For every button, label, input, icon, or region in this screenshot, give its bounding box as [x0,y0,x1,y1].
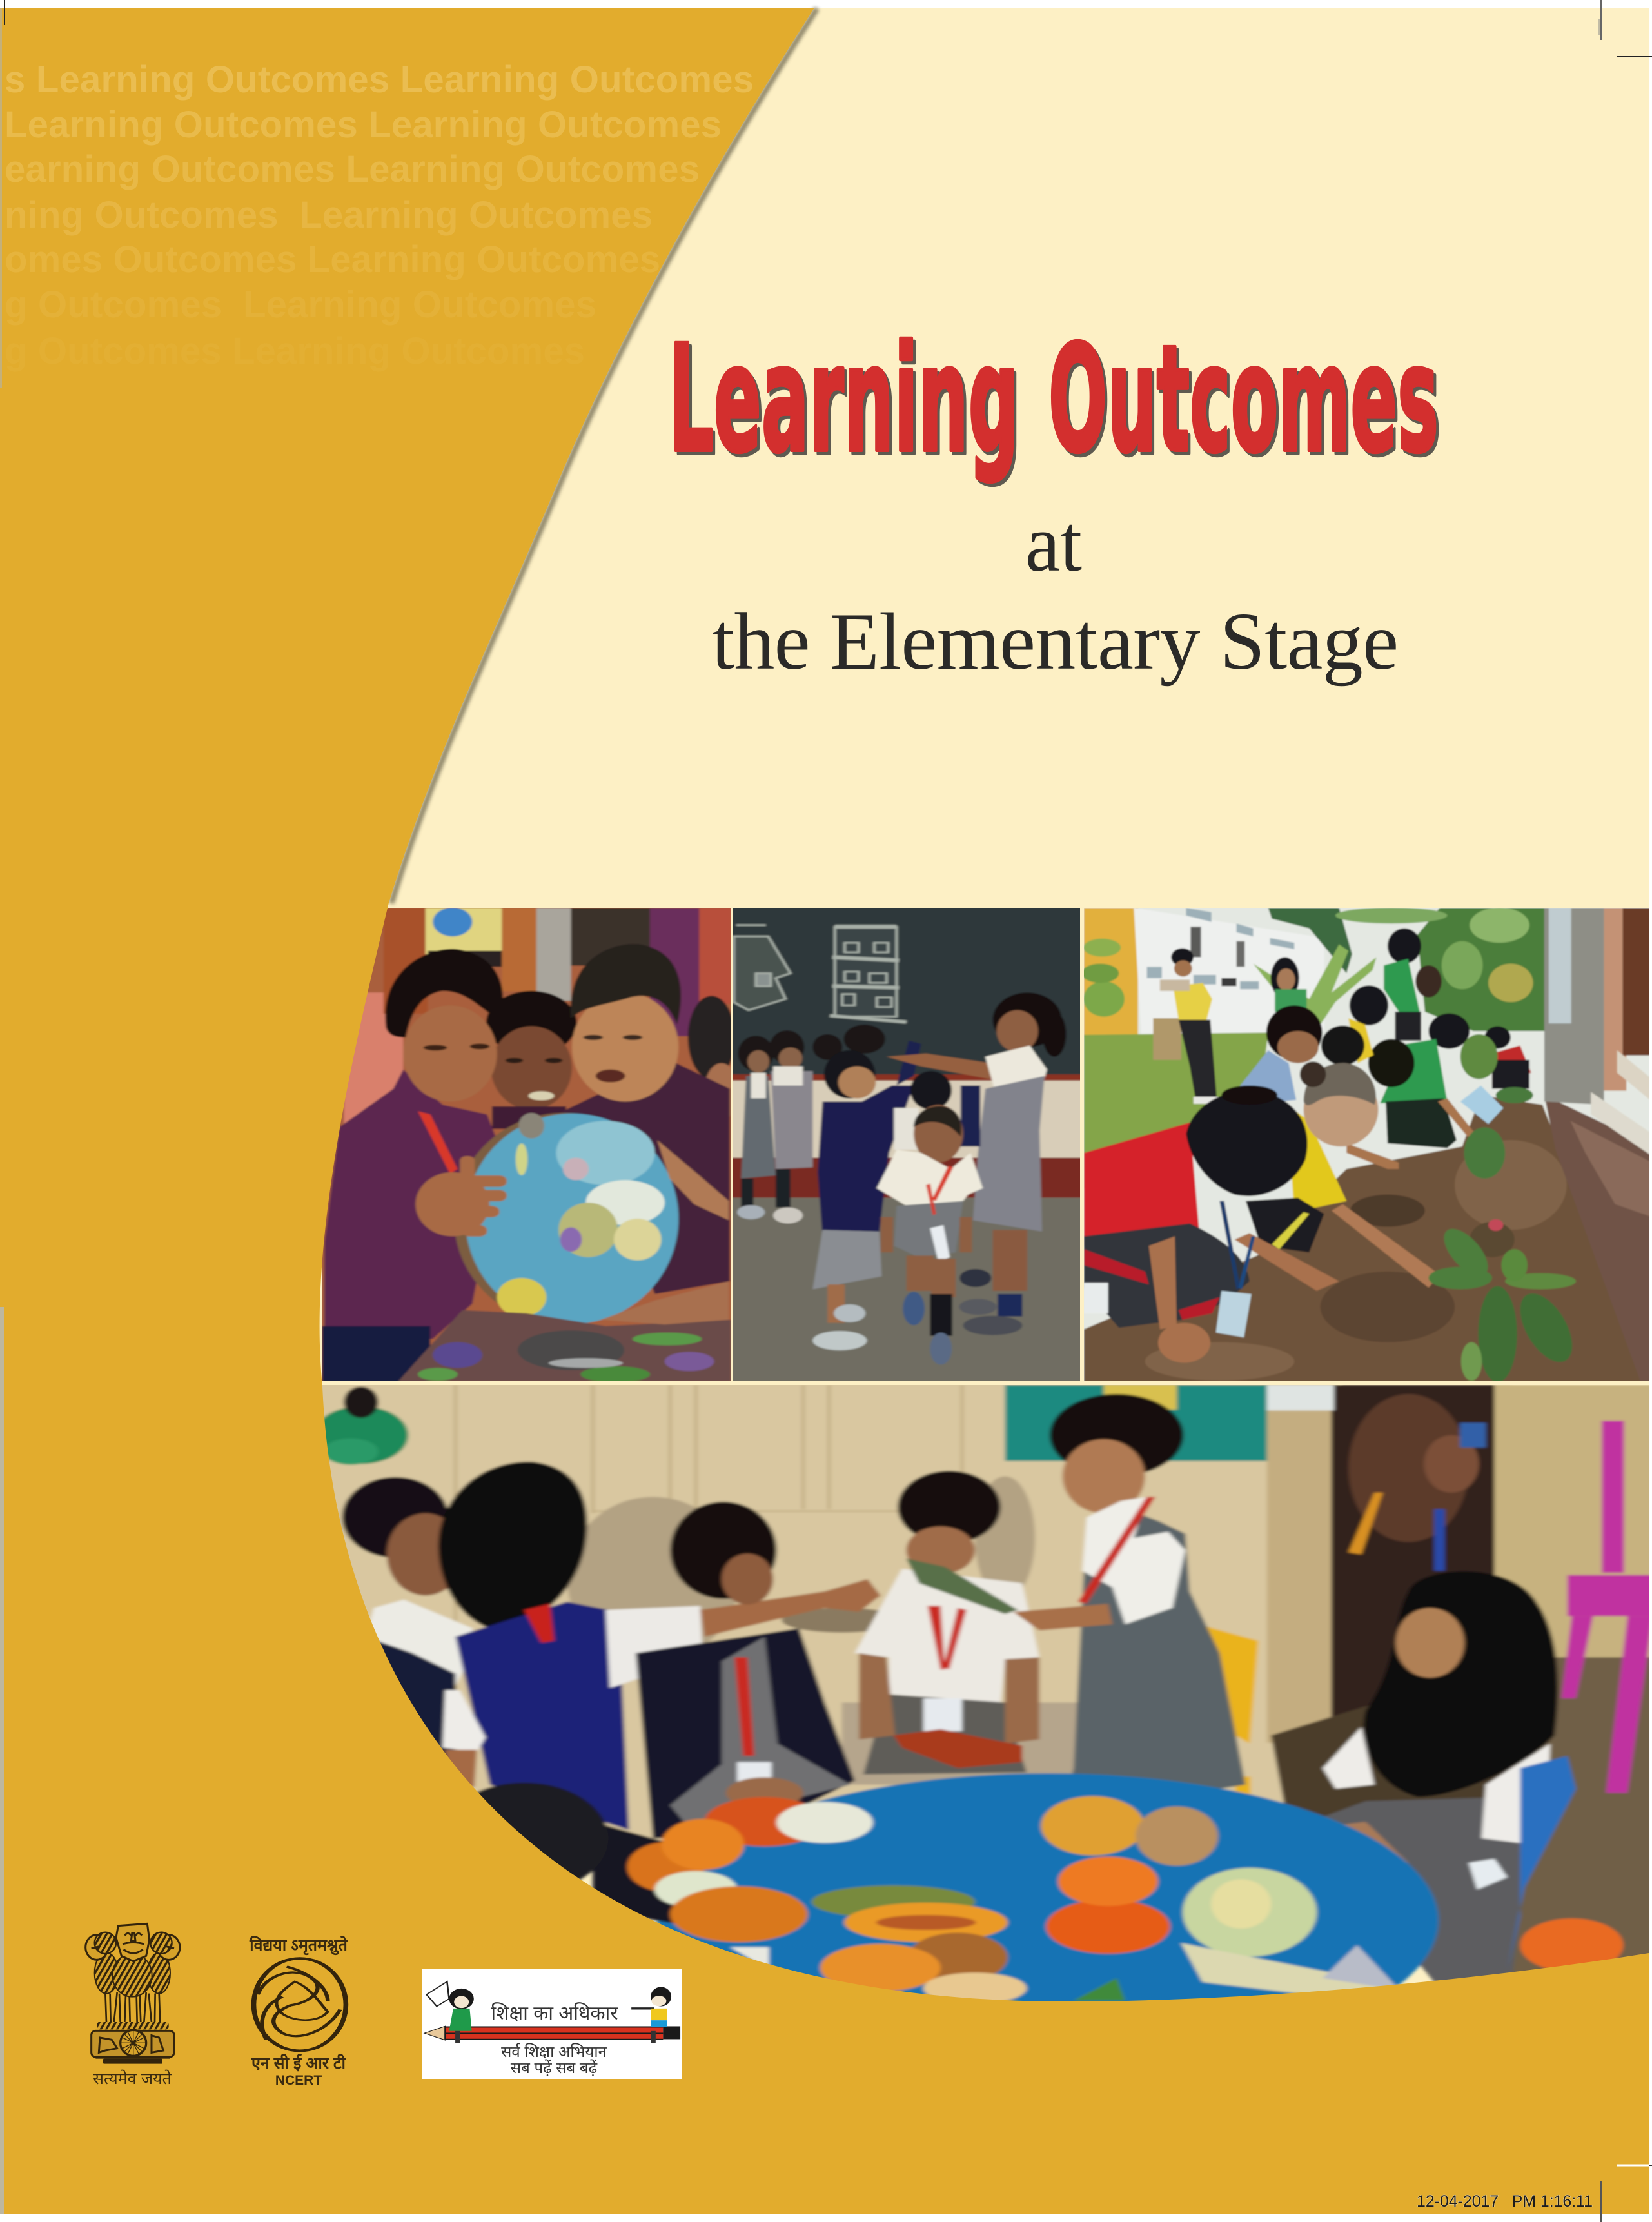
yellow chair [1198,1624,1258,1744]
SSA heading: शिक्षा का अधिकार [491,2002,618,2024]
legs dark [1246,1198,1324,1252]
pencil [424,2026,680,2040]
NCERT Hindi name: एन सी ई आर टी [251,2054,347,2072]
background repeated text pattern: earning Outcomes Learning Outcomes [5,148,700,190]
navy cardigan child [812,1041,921,1350]
logo: Sarva Shiksha Abhiyan [422,1969,682,2079]
background repeated text pattern: omes Outcomes Learning Outcomes [5,239,660,280]
subtitle: the Elementary Stage: the Elementary Stage [712,597,1399,687]
child holding mirror [855,1471,1039,1775]
background repeated text pattern: ning Outcomes Learning Outcomes [5,194,653,236]
line of girls [737,1025,885,1223]
magenta chair [1561,1421,1652,1793]
soil bed [1084,1095,1652,1384]
girl with book [426,1981,474,2043]
girl with black scarf [1288,1571,1623,1982]
photo: children with fruit models at blue table [310,1382,1652,2068]
far right boy [686,995,731,1116]
standing child in yellow [1153,949,1219,1104]
fruit models [627,1796,1400,2004]
background repeated text pattern: g Outcomes Learning Outcomes [5,284,596,326]
photo: children with globe [310,906,739,1384]
title: Learning Outcomes: Learning [669,313,1019,485]
NCERT English name: NCERT [275,2073,322,2088]
tree cutout [314,1386,408,1465]
left boy [322,949,503,1382]
background repeated text pattern: s Learning Outcomes Learning Outcomes [5,59,754,101]
SSA slogan line 2: सब पढ़ें सब बढ़ें [511,2059,598,2077]
mango sapling [1429,1223,1583,1382]
blue table [657,1773,1439,2068]
brick wall [1544,908,1652,1384]
child far left [342,1477,473,1785]
wall painting [1005,1385,1334,1461]
title: Learning Outcomes: Learning [671,317,1021,488]
NCERT motto: विद्यया ऽमृतमश्नुते [249,1936,349,1956]
table and globe stand [398,1310,731,1382]
center boy [877,1071,983,1364]
small plants [1460,1034,1533,1257]
curve shadow [391,8,817,903]
background repeated text pattern [5,59,754,372]
globe [454,1113,678,1324]
tall girl [887,992,1067,1335]
toys and furniture in back room [1348,1394,1486,1571]
chalk drawings [734,925,907,1022]
children at the bed [1237,985,1531,1169]
middle boy [486,991,577,1129]
photo: children gardening [1081,906,1652,1384]
print timestamp: 12-04-2017 PM 1:16:11 [1417,2192,1593,2210]
child in blue vest [438,1462,881,1830]
hands [415,1140,729,1324]
subtitle: at: at [1025,499,1082,589]
shadows on wall [567,1497,739,1661]
standing girl in grey [1014,1394,1245,1797]
girl in red [1084,1086,1339,1362]
emblem motto: सत्यमेव जयते [93,2069,172,2088]
left edge strips [0,8,4,2214]
girl and tall child in green [1271,929,1442,1041]
trees and banana leaves [1081,907,1546,1031]
SSA slogan line 1: सर्व शिक्षा अभियान [501,2043,607,2061]
boy with pointing arm [631,1987,671,2043]
seated child with red lanyard [636,1502,855,1838]
logo: NCERT [249,1936,349,2088]
head in foreground [440,1783,696,1925]
NCERT swirl mark [253,1958,346,2050]
girl with glasses [1287,1061,1440,1288]
logo: national emblem [86,1923,180,2088]
lawn [1084,1032,1269,1154]
right boy [556,944,730,1294]
background repeated text pattern: Learning Outcomes Learning Outcomes [5,104,722,146]
photo: children playing in classroom [729,906,1089,1384]
background repeated text pattern: g Outcomes Learning Outcomes [5,330,585,372]
